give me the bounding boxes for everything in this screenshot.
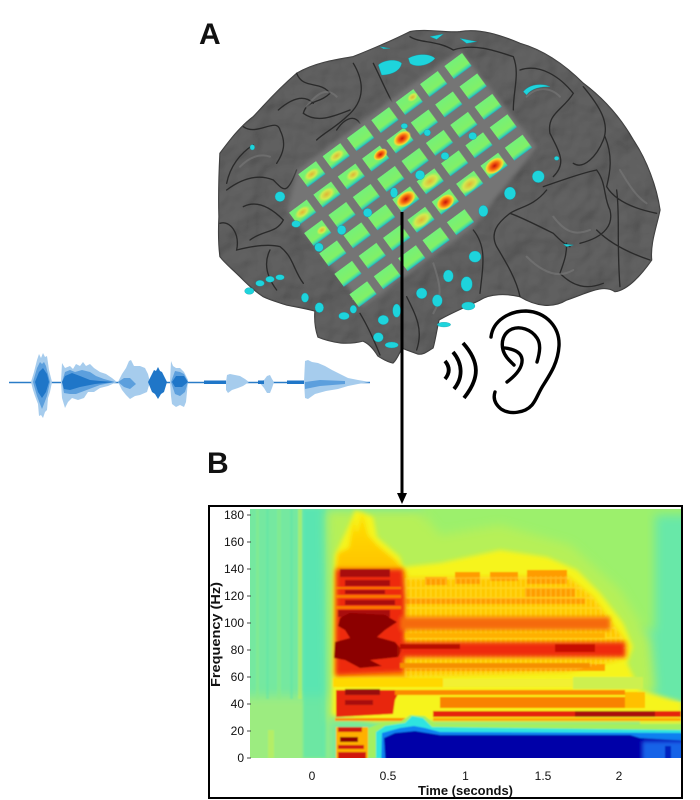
onset low band bbox=[334, 726, 369, 758]
y axis labels: 180 bbox=[224, 508, 244, 522]
sustained bands bbox=[400, 617, 610, 630]
x axis labels bbox=[309, 769, 623, 783]
y axis labels: 40 bbox=[231, 697, 244, 711]
brain with electrode grid bbox=[219, 30, 660, 363]
y axis labels: 80 bbox=[231, 643, 244, 657]
label B: B bbox=[207, 447, 229, 480]
suppressed band bbox=[366, 715, 681, 758]
brain surface bbox=[219, 30, 660, 363]
y axis labels bbox=[224, 508, 244, 765]
y axis labels: 100 bbox=[224, 616, 244, 630]
y axis title: Frequency (Hz) bbox=[208, 582, 223, 687]
panel: spectrogram bbox=[208, 500, 695, 798]
cyan blobs bbox=[245, 34, 573, 348]
y axis labels: 120 bbox=[224, 589, 244, 603]
arrow from electrode to spectrogram bbox=[397, 212, 407, 504]
x axis labels: 1.5 bbox=[535, 769, 552, 783]
x axis labels: 1 bbox=[462, 769, 469, 783]
x axis title: Time (seconds) bbox=[418, 783, 513, 798]
icon: sound waves bbox=[445, 343, 476, 398]
electrode tiles bbox=[273, 52, 549, 309]
electrode grid backing bbox=[287, 50, 537, 307]
panel frame bbox=[209, 506, 682, 798]
y axis labels: 60 bbox=[231, 670, 244, 684]
y axis labels: 20 bbox=[231, 724, 244, 738]
x axis labels: 0 bbox=[309, 769, 316, 783]
low frequency bands bbox=[336, 690, 400, 717]
heat map bbox=[250, 509, 681, 758]
y axis ticks bbox=[247, 515, 251, 758]
speech waveform bbox=[9, 353, 370, 418]
y axis labels: 0 bbox=[237, 751, 244, 765]
y axis labels: 160 bbox=[224, 535, 244, 549]
label A: A bbox=[199, 18, 221, 51]
x axis labels: 2 bbox=[616, 769, 623, 783]
icon: ear bbox=[491, 311, 559, 412]
x axis labels: 0.5 bbox=[380, 769, 397, 783]
y axis labels: 140 bbox=[224, 562, 244, 576]
main burst bbox=[336, 569, 405, 675]
